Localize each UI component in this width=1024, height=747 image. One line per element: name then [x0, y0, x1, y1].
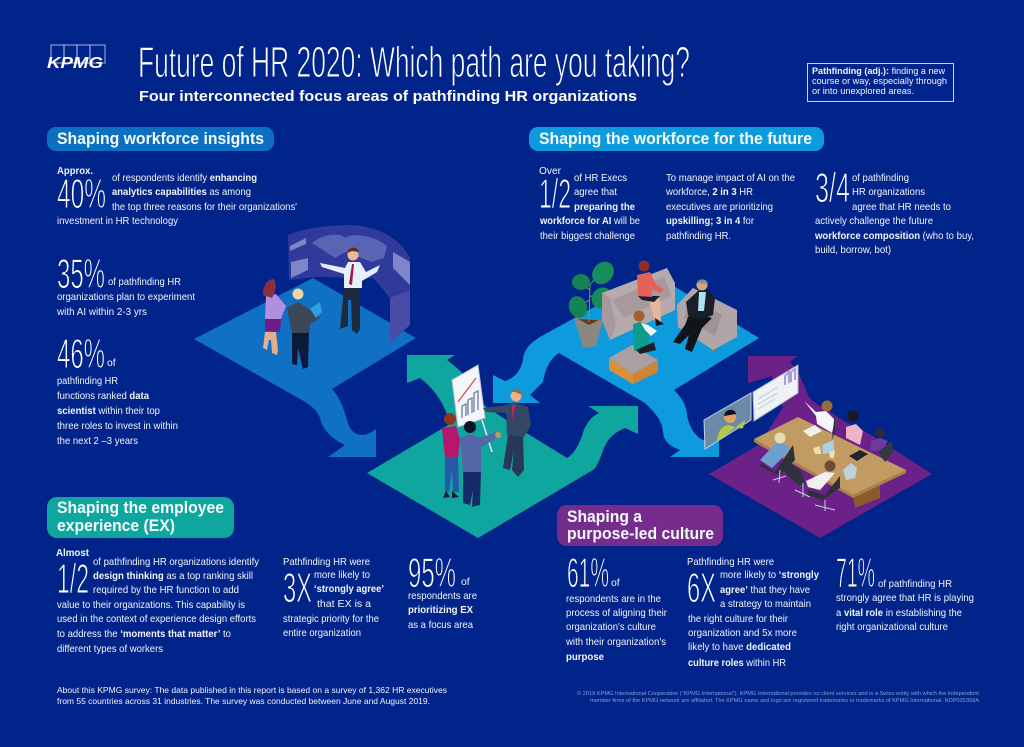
stat: 3X: strategic priority for the — [283, 614, 379, 625]
stat: almost 1/2: to address the ‘moments that matter’ to — [57, 629, 231, 640]
logo: KPMG — [47, 45, 105, 72]
stat: 71%: a vital role in establishing the — [836, 608, 962, 619]
figure: woman in purple — [263, 279, 286, 355]
stat: 46%: 46% — [57, 330, 105, 377]
stat: 46%: the next 2 –3 years — [57, 436, 138, 447]
illustration: light blue platform with arrows — [493, 274, 759, 457]
figure: man in blue shirt — [460, 421, 501, 507]
stat: 95%: prioritizing EX — [408, 605, 473, 616]
illustration: armchair — [677, 288, 737, 352]
text: copyright: member firms of the KPMG network are affiliated. The KPMG name and logo are registered trademarks or trademarks of KPMG International. NDP035359A — [590, 698, 979, 704]
stat: 3X: 3X — [283, 564, 312, 611]
figure: woman in magenta — [442, 413, 460, 498]
stat: 1/2 of HR execs: of HR Execs — [574, 173, 627, 184]
stat: 35% — [56, 250, 195, 318]
stat: almost 1/2: 1/2 — [57, 555, 89, 602]
stat: 46%: three roles to invest in within — [57, 421, 178, 432]
stat: 1/2 of HR execs: preparing the — [574, 202, 635, 213]
text: survey note: from 55 countries across 31 industries. The survey was conducted between June and August 2019. — [57, 696, 430, 706]
stat: 46%: scientist within their top — [57, 406, 160, 417]
stat: 61%: of — [611, 578, 620, 589]
illustration: plant — [566, 257, 618, 348]
figure: person on ottoman — [633, 310, 657, 354]
stat: 61%: with their organization's — [565, 637, 666, 648]
stat: 3X: Pathfinding HR were — [283, 557, 370, 568]
figure: presenter at data wall — [320, 248, 380, 334]
stat: 71%: 71% — [836, 549, 875, 596]
stat: 40%: of respondents identify enhancing — [112, 173, 257, 184]
figure: presenter at flipchart — [483, 390, 531, 477]
stat: 6X: 6X — [687, 564, 716, 611]
stat: 3X — [283, 557, 384, 639]
illustration: purple platform with arrow — [709, 356, 932, 538]
stat: 3/4: workforce composition (who to buy, — [814, 231, 974, 242]
stat: 3/4: agree that HR needs to — [852, 202, 951, 213]
stat: 6X: organization and 5x more — [688, 628, 797, 639]
heading: workforce for the future: Shaping the workforce for the future — [539, 130, 812, 148]
stat: 71%: right organizational culture — [836, 622, 948, 633]
stat: 6X: more likely to ‘strongly — [720, 570, 819, 581]
figure: blond man with hologram — [287, 288, 322, 369]
heading: workforce insights: Shaping workforce insights — [57, 130, 264, 148]
stat: 35%: 35% — [57, 250, 105, 297]
stat: 3X: ‘strongly agree’ — [314, 584, 384, 595]
stat: 61% — [565, 549, 667, 663]
heading: purpose-led culture: purpose-led culture — [567, 525, 714, 543]
stat: 40%: analytics capabilities as among — [112, 187, 251, 198]
illustration: meeting table — [754, 417, 906, 508]
stat: 6X: agree’ that they have — [720, 585, 810, 596]
stat: 95% — [408, 549, 477, 631]
stat: almost 1/2: Almost — [56, 548, 90, 559]
stat: 1/2 of HR execs — [539, 166, 640, 242]
panel: Shaping the employee experience — [47, 497, 477, 655]
stat: 1/2 of HR execs: agree that — [574, 187, 617, 198]
stat: 3/4: of pathfinding — [852, 173, 909, 184]
heading: employee experience: experience (EX) — [57, 517, 175, 535]
illustration: flipchart — [452, 365, 492, 452]
stat: 3/4: HR organizations — [852, 187, 925, 198]
stat: almost 1/2: of pathfinding HR organizations identify — [93, 557, 260, 568]
stat: 6X — [687, 557, 819, 669]
stat: 95%: respondents are — [408, 591, 477, 602]
text: upskilling: pathfinding HR. — [666, 231, 731, 242]
stat: 3X: that EX is a — [317, 599, 371, 610]
callout: pathfinding definition: Pathfinding (adj.): finding a new — [812, 66, 945, 76]
text: copyright: © 2019 KPMG International Cooperative (“KPMG International”). KPMG International provides no client services and is a Swiss entity with which the independent — [577, 690, 980, 697]
panel: Shaping workforce insights — [47, 127, 297, 447]
stat: 40%: 40% — [57, 170, 106, 217]
stat: 61%: organization's culture — [566, 622, 656, 633]
stat: 46%: pathfinding HR — [57, 376, 118, 387]
stat: almost 1/2: used in the context of experience design efforts — [57, 614, 256, 625]
stat: almost 1/2: value to their organizations. This capability is — [57, 600, 245, 611]
figures: meeting participants — [760, 400, 893, 511]
stat: 6X: Pathfinding HR were — [687, 557, 774, 568]
heading: employee experience: Shaping the employee — [57, 499, 224, 517]
stat: almost 1/2: design thinking as a top ranking skill — [93, 571, 253, 582]
stat: 3X: entire organization — [283, 628, 361, 639]
stat: 6X: a strategy to maintain — [720, 599, 811, 610]
text: survey note: About this KPMG survey: The data published in this report is based on a survey of 1,362 HR executives — [57, 685, 447, 695]
stat: 3/4: actively challenge the future — [815, 216, 933, 227]
stat: 61%: 61% — [567, 549, 609, 596]
text: upskilling: workforce, 2 in 3 HR — [665, 187, 753, 198]
heading: employee experience — [47, 497, 234, 538]
stat: 46%: functions ranked data — [57, 391, 149, 402]
stat: 40%: investment in HR technology — [57, 216, 179, 227]
subtitle: Four interconnected focus areas of pathfinding HR organizations — [139, 88, 637, 105]
stat: 61%: respondents are in the — [566, 594, 661, 605]
stat: 35%: with AI within 2-3 yrs — [56, 307, 147, 318]
stat: 71%: strongly agree that HR is playing — [836, 593, 974, 604]
text: upskilling: executives are prioritizing — [666, 202, 773, 213]
text: survey note — [57, 685, 447, 706]
heading: purpose-led culture: Shaping a — [567, 508, 643, 526]
callout: pathfinding definition: course or way, especially through — [812, 76, 947, 86]
callout: pathfinding definition: or into unexplored areas. — [812, 86, 914, 96]
stat: 95%: as a focus area — [408, 620, 473, 631]
stat: 61%: process of aligning their — [566, 608, 667, 619]
text: upskilling: upskilling; 3 in 4 for — [666, 216, 754, 227]
stat: almost 1/2 — [56, 548, 260, 655]
illustration: holographic data wall — [288, 225, 410, 343]
stat: 46%: of — [107, 358, 116, 369]
stat: 1/2 of HR execs: workforce for AI will be — [539, 216, 640, 227]
stat: 3/4: 3/4 — [815, 164, 850, 211]
stat: 35%: organizations plan to experiment — [57, 292, 195, 303]
stat: almost 1/2: required by the HR function to add — [93, 585, 239, 596]
stat: 3/4 — [814, 164, 974, 256]
figure: man in armchair — [673, 279, 715, 352]
stat: 71% — [836, 549, 974, 633]
text: upskilling — [665, 173, 795, 242]
callout: pathfinding definition — [808, 64, 954, 102]
stat: 61%: purpose — [566, 652, 604, 663]
stat: 1/2 of HR execs: 1/2 — [539, 170, 571, 217]
illustration: teal platform with arrows — [367, 355, 638, 538]
stat: 95%: of — [461, 577, 470, 588]
illustration: ottoman — [609, 345, 658, 384]
logo: KPMG: KPMG — [47, 55, 103, 72]
panel: Shaping a purpose-led culture — [557, 505, 974, 669]
stat: almost 1/2: different types of workers — [57, 644, 163, 655]
stat: 3/4: build, borrow, bot) — [815, 245, 891, 256]
stat: 95%: 95% — [408, 549, 456, 596]
text: upskilling: To manage impact of AI on the — [666, 173, 795, 184]
panel: Shaping the workforce for the future — [529, 127, 974, 256]
illustration: sofa — [602, 268, 675, 340]
stat: 40% — [57, 166, 297, 227]
illustration: blue platform with arrow — [194, 278, 416, 457]
figure: woman on sofa — [637, 260, 664, 326]
stat: 46% — [57, 330, 178, 447]
illustration: video screens — [704, 365, 798, 449]
text: copyright — [577, 690, 980, 704]
stat: 6X: likely to have dedicated — [688, 642, 791, 653]
stat: 1/2 of HR execs: their biggest challenge — [540, 231, 635, 242]
stat: 6X: the right culture for their — [688, 614, 788, 625]
stat: 40%: the top three reasons for their organizations' — [112, 202, 297, 213]
stat: 71%: of pathfinding HR — [878, 579, 952, 590]
stat: 6X: culture roles within HR — [688, 658, 786, 669]
stat: 1/2 of HR execs: Over — [539, 166, 562, 177]
stat: 40%: Approx. — [57, 166, 93, 177]
heading: purpose-led culture — [557, 505, 723, 546]
stat: 35%: of pathfinding HR — [108, 277, 181, 288]
stat: 3X: more likely to — [314, 570, 370, 581]
